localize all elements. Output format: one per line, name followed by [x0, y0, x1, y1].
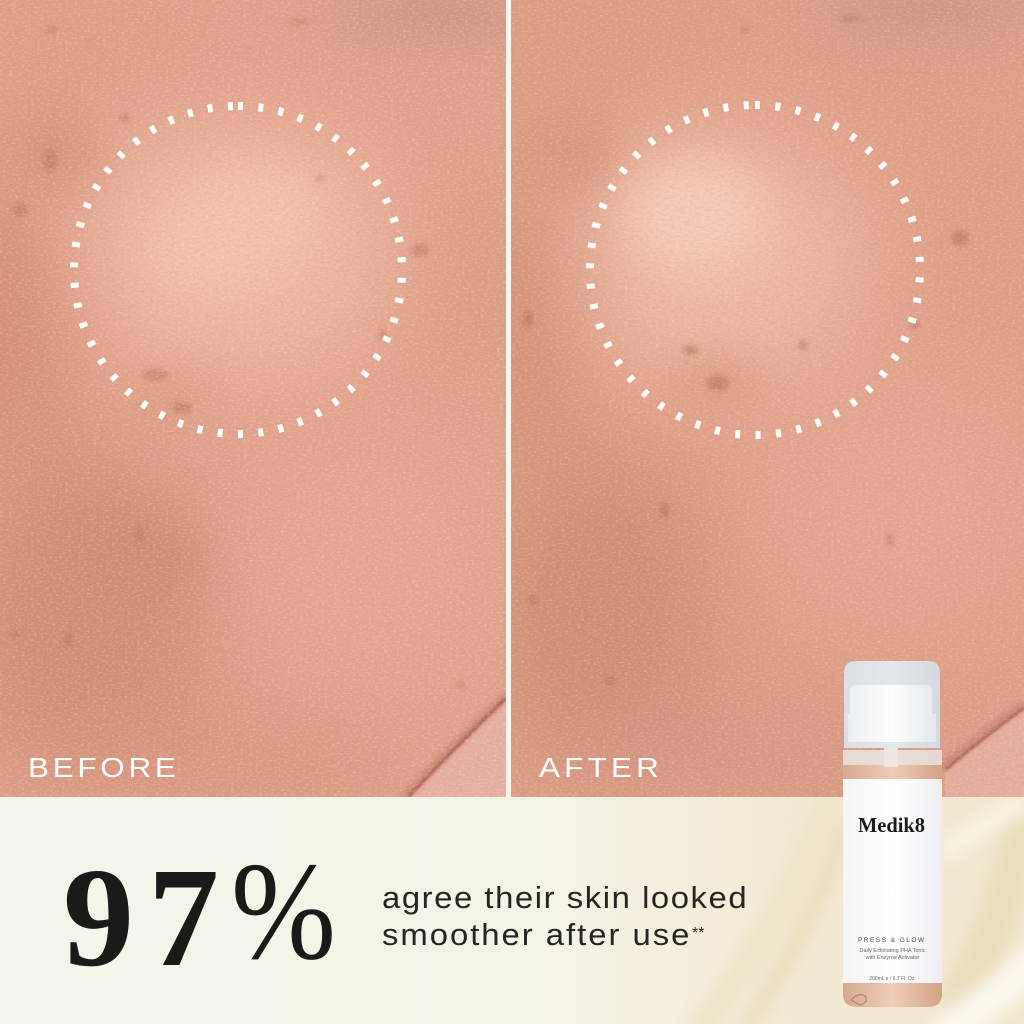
brand name: Medik8 — [858, 813, 925, 837]
product volume: 200mL e / 6.7 Fl. Oz. — [869, 976, 916, 982]
dotted circle: before treatment area — [74, 106, 402, 434]
bottle shoulder — [843, 750, 942, 765]
skin crease — [404, 696, 506, 797]
white label — [843, 779, 942, 983]
bottle base detail — [851, 995, 866, 1005]
product bottle — [843, 661, 942, 1007]
dip tube — [884, 745, 898, 767]
statistic caption: agree their skin looked — [382, 880, 747, 915]
statistic: 97 percent: 7 — [148, 838, 219, 996]
label: after: AFTER — [539, 753, 659, 784]
skin crease — [941, 704, 1024, 797]
skin texture — [632, 168, 778, 285]
panel: after photo — [511, 0, 1024, 797]
skin texture — [166, 170, 498, 784]
statistic caption: ** — [692, 925, 704, 942]
label: before: BEFORE — [28, 753, 176, 784]
statistic: percent sign: % — [231, 834, 336, 989]
product description: Daily Exfoliating PHA Tonic — [860, 948, 926, 954]
over cap — [844, 661, 940, 748]
pump — [848, 685, 936, 742]
divider: gap between photos — [506, 0, 511, 797]
white label: with Enzyme Activator — [865, 955, 920, 961]
dotted circle: after treatment area — [590, 105, 920, 435]
panel: cream statistic band — [639, 797, 1024, 1024]
panel: before photo — [0, 0, 506, 797]
statistic caption — [382, 880, 747, 952]
product name: PRESS & GLOW — [858, 937, 925, 944]
statistic caption: smoother after use — [382, 917, 689, 952]
bottle body — [843, 750, 942, 1007]
statistic: 97 percent: 9 — [63, 838, 134, 996]
